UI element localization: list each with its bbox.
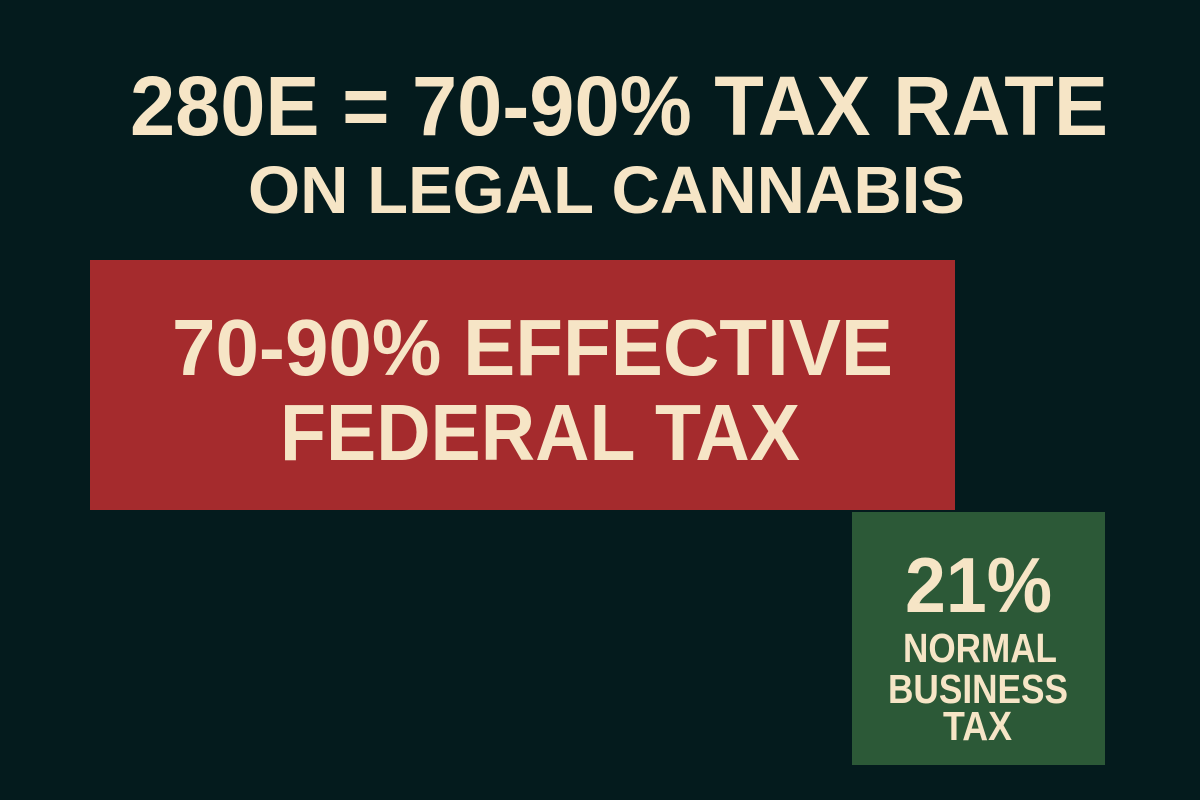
title — [130, 59, 1108, 228]
panel: 70-90% effective federal tax — [90, 260, 955, 510]
title: 280E = 70-90% TAX RATE — [130, 59, 1108, 153]
panel: 21% normal business tax: BUSINESS — [888, 666, 1068, 712]
panel: 21% normal business tax: NORMAL — [903, 625, 1057, 671]
panel: 21% normal business tax — [852, 512, 1105, 765]
title: ON LEGAL CANNABIS — [248, 153, 965, 228]
panel: 70-90% effective federal tax: FEDERAL TAX — [280, 388, 800, 477]
panel: 21% normal business tax: TAX — [943, 703, 1012, 749]
panel: 21% normal business tax: 21% — [905, 541, 1052, 629]
panel: 70-90% effective federal tax: 70-90% EFFECTIVE — [172, 303, 893, 392]
